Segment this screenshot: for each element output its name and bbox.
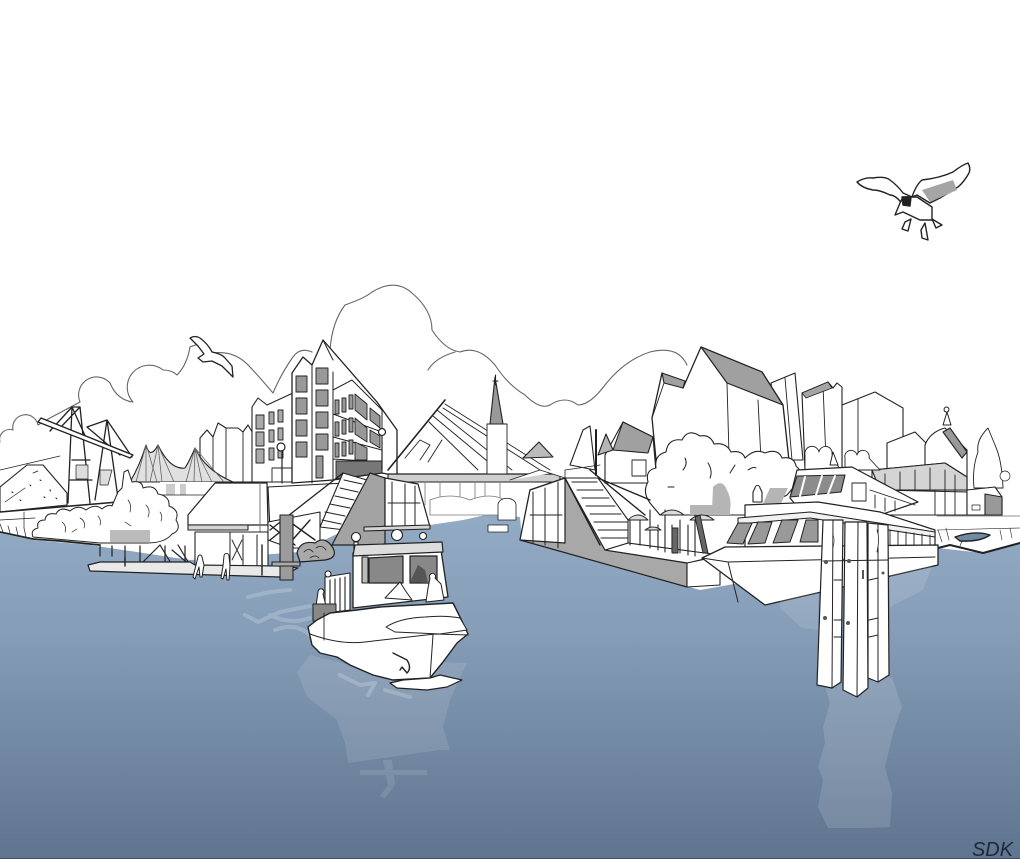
large modern gabled buildings [652,347,903,470]
pile 2 [843,522,868,697]
pile 1 [817,520,843,688]
middle deck [745,502,935,560]
small house [967,487,1002,515]
clouds [0,285,690,470]
hull [702,545,938,605]
distant shore hill [0,456,118,528]
street lamps [277,428,386,483]
circus-side quay wall [268,483,345,530]
circus tents [130,445,233,495]
terrace cafe crowd [628,510,714,556]
lower wing [252,393,293,482]
church spire [487,375,507,474]
crane [38,407,133,503]
windows [727,520,818,544]
right lock block and stairs [520,470,720,587]
main gabled building [652,347,790,470]
cable-stayed bridge [388,400,560,515]
trees left [0,470,190,565]
pontoon [88,545,298,577]
left lock block [332,473,430,545]
bow emblem [393,653,410,673]
lamps [352,530,426,552]
ferry reflection [780,563,933,630]
statue [830,452,838,465]
seagull small [190,336,233,377]
far tower right [842,392,903,470]
right far buildings and turret [887,407,1010,490]
glass pavilion building [872,463,967,515]
crew figures [313,573,444,621]
side cabin [325,573,350,613]
distant buildings right of canal [488,422,657,532]
water [0,514,1020,859]
main boat [308,530,468,690]
terrace [605,543,720,563]
rocks [297,540,334,562]
bow wave [390,675,462,690]
boat reflection [297,655,467,798]
ferry [702,467,938,605]
steel stairs truss [268,512,320,548]
stairs [565,478,628,550]
pavilion [188,483,268,567]
pile reflection [818,677,902,828]
figures on pontoon [193,554,230,580]
wheelhouse [353,543,448,608]
hull [308,603,468,680]
seagull large [857,163,970,240]
pile 3 [868,523,889,682]
haze band [0,437,620,456]
water ripples [245,590,410,697]
upper deck [790,467,918,515]
mooring piles [817,520,889,697]
warehouse building [252,340,397,483]
bottom edge line [0,858,1020,859]
main block [292,340,397,483]
person on terrace [753,486,762,502]
mooring pile grey [272,515,300,580]
background gabled buildings [200,423,254,482]
big tree [645,433,880,515]
right shoreline [937,516,1020,553]
windows [296,368,382,479]
stairs left [270,473,372,530]
